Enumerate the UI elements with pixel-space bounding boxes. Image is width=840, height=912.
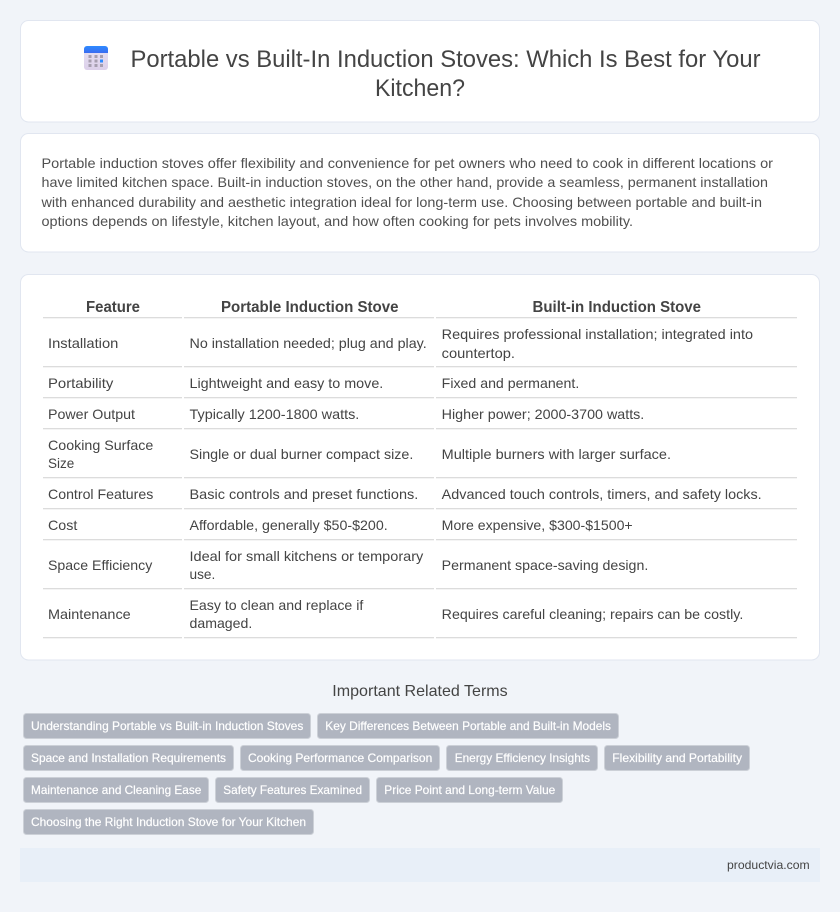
row: space efficiency: Ideal for small kitchens or temporary: [190, 548, 423, 564]
row: installation: Requires professional installation; integrated into: [442, 326, 753, 342]
row: cost: Affordable, generally $50-$200.: [190, 517, 388, 533]
row: installation: No installation needed; plug and play.: [190, 335, 427, 351]
row: control features: Basic controls and preset functions.: [190, 486, 418, 502]
row: cost: [43, 517, 797, 540]
row: cooking surface size: [43, 437, 797, 478]
tag: Choosing the Right Induction Stove for Your Kitchen: [31, 815, 306, 829]
row: installation: [43, 326, 797, 367]
tag: Safety Features Examined: [223, 783, 362, 797]
tag: [446, 746, 598, 770]
row: installation: countertop.: [442, 345, 515, 361]
tag: [216, 778, 370, 802]
tag: Space and Installation Requirements: [31, 751, 226, 765]
row: space efficiency: use.: [190, 566, 215, 582]
table header: Built-in Induction Stove: [532, 299, 701, 316]
tag: Cooking Performance Comparison: [248, 751, 432, 765]
row: portability: Fixed and permanent.: [442, 375, 579, 391]
row: power output: Power Output: [48, 406, 135, 422]
tag: [24, 778, 208, 802]
tag: [376, 778, 562, 802]
panel: comparison table: [20, 274, 820, 660]
tag: [24, 746, 234, 770]
row: cost: More expensive, $300-$1500+: [442, 517, 633, 533]
table header: [43, 299, 797, 318]
tag: [604, 746, 750, 770]
row: maintenance: [43, 597, 797, 638]
heading: important related terms: Important Related Terms: [332, 683, 508, 700]
tag: [240, 746, 440, 770]
row: portability: Lightweight and easy to move.: [190, 375, 383, 391]
row: control features: Advanced touch controls, timers, and safety locks.: [442, 486, 762, 502]
tag: [318, 714, 618, 738]
row: control features: Control Features: [48, 486, 153, 502]
footer: [20, 848, 820, 882]
row: cooking surface size: Cooking Surface: [48, 437, 154, 453]
panel: intro paragraph: Portable induction stoves offer flexibility and convenience for pet owners who need to cook in different locations or: [42, 155, 773, 171]
panel: intro paragraph: [20, 134, 820, 252]
row: portability: [43, 375, 797, 398]
row: maintenance: Maintenance: [48, 606, 131, 622]
row: maintenance: damaged.: [190, 615, 252, 631]
row: cooking surface size: Size: [48, 455, 75, 471]
row: cost: Cost: [48, 517, 77, 533]
tag: Price Point and Long-term Value: [384, 783, 556, 797]
row: maintenance: Easy to clean and replace if: [190, 597, 363, 613]
row: control features: [43, 486, 797, 509]
tag: Energy Efficiency Insights: [455, 751, 590, 765]
tag: Maintenance and Cleaning Ease: [31, 783, 202, 797]
related term tags: [24, 714, 750, 834]
table header: Portable Induction Stove: [221, 299, 399, 316]
row: power output: Typically 1200-1800 watts.: [190, 406, 359, 422]
row: installation: Installation: [48, 335, 118, 351]
title: Portable vs Built-In Induction Stoves: Which Is Best for Your: [130, 46, 761, 73]
panel: intro paragraph: with enhanced durability and aesthetic integration ideal for long-term use. Choosing between portable and built-in: [40, 194, 762, 210]
row: power output: Higher power; 2000-3700 watts.: [442, 406, 644, 422]
tag: Understanding Portable vs Built-in Induction Stoves: [31, 719, 303, 733]
footer: productvia.com: [727, 858, 810, 872]
row: space efficiency: Permanent space-saving design.: [442, 557, 648, 573]
title: Kitchen?: [375, 75, 465, 102]
panel: intro paragraph: have limited kitchen space. Built-in induction stoves, on the other hand, provide a seamless, permanent installation: [42, 174, 768, 190]
table header: Feature: [86, 299, 140, 316]
title: [130, 46, 761, 102]
panel: intro paragraph: options depends on lifestyle, kitchen layout, and how often cooking for pets involves mobility.: [42, 213, 633, 229]
row: cooking surface size: Single or dual burner compact size.: [190, 446, 413, 462]
row: power output: [43, 406, 797, 429]
icon: calendar: [84, 46, 108, 70]
tag: Flexibility and Portability: [612, 751, 742, 765]
row: space efficiency: Space Efficiency: [48, 557, 152, 573]
row: cooking surface size: Multiple burners with larger surface.: [442, 446, 671, 462]
tag: [24, 714, 310, 738]
row: maintenance: Requires careful cleaning; repairs can be costly.: [442, 606, 743, 622]
tag: [24, 810, 314, 834]
row: space efficiency: [43, 548, 797, 589]
tag: Key Differences Between Portable and Built-in Models: [325, 719, 611, 733]
row: portability: Portability: [48, 375, 113, 391]
panel: title header: [20, 20, 820, 122]
